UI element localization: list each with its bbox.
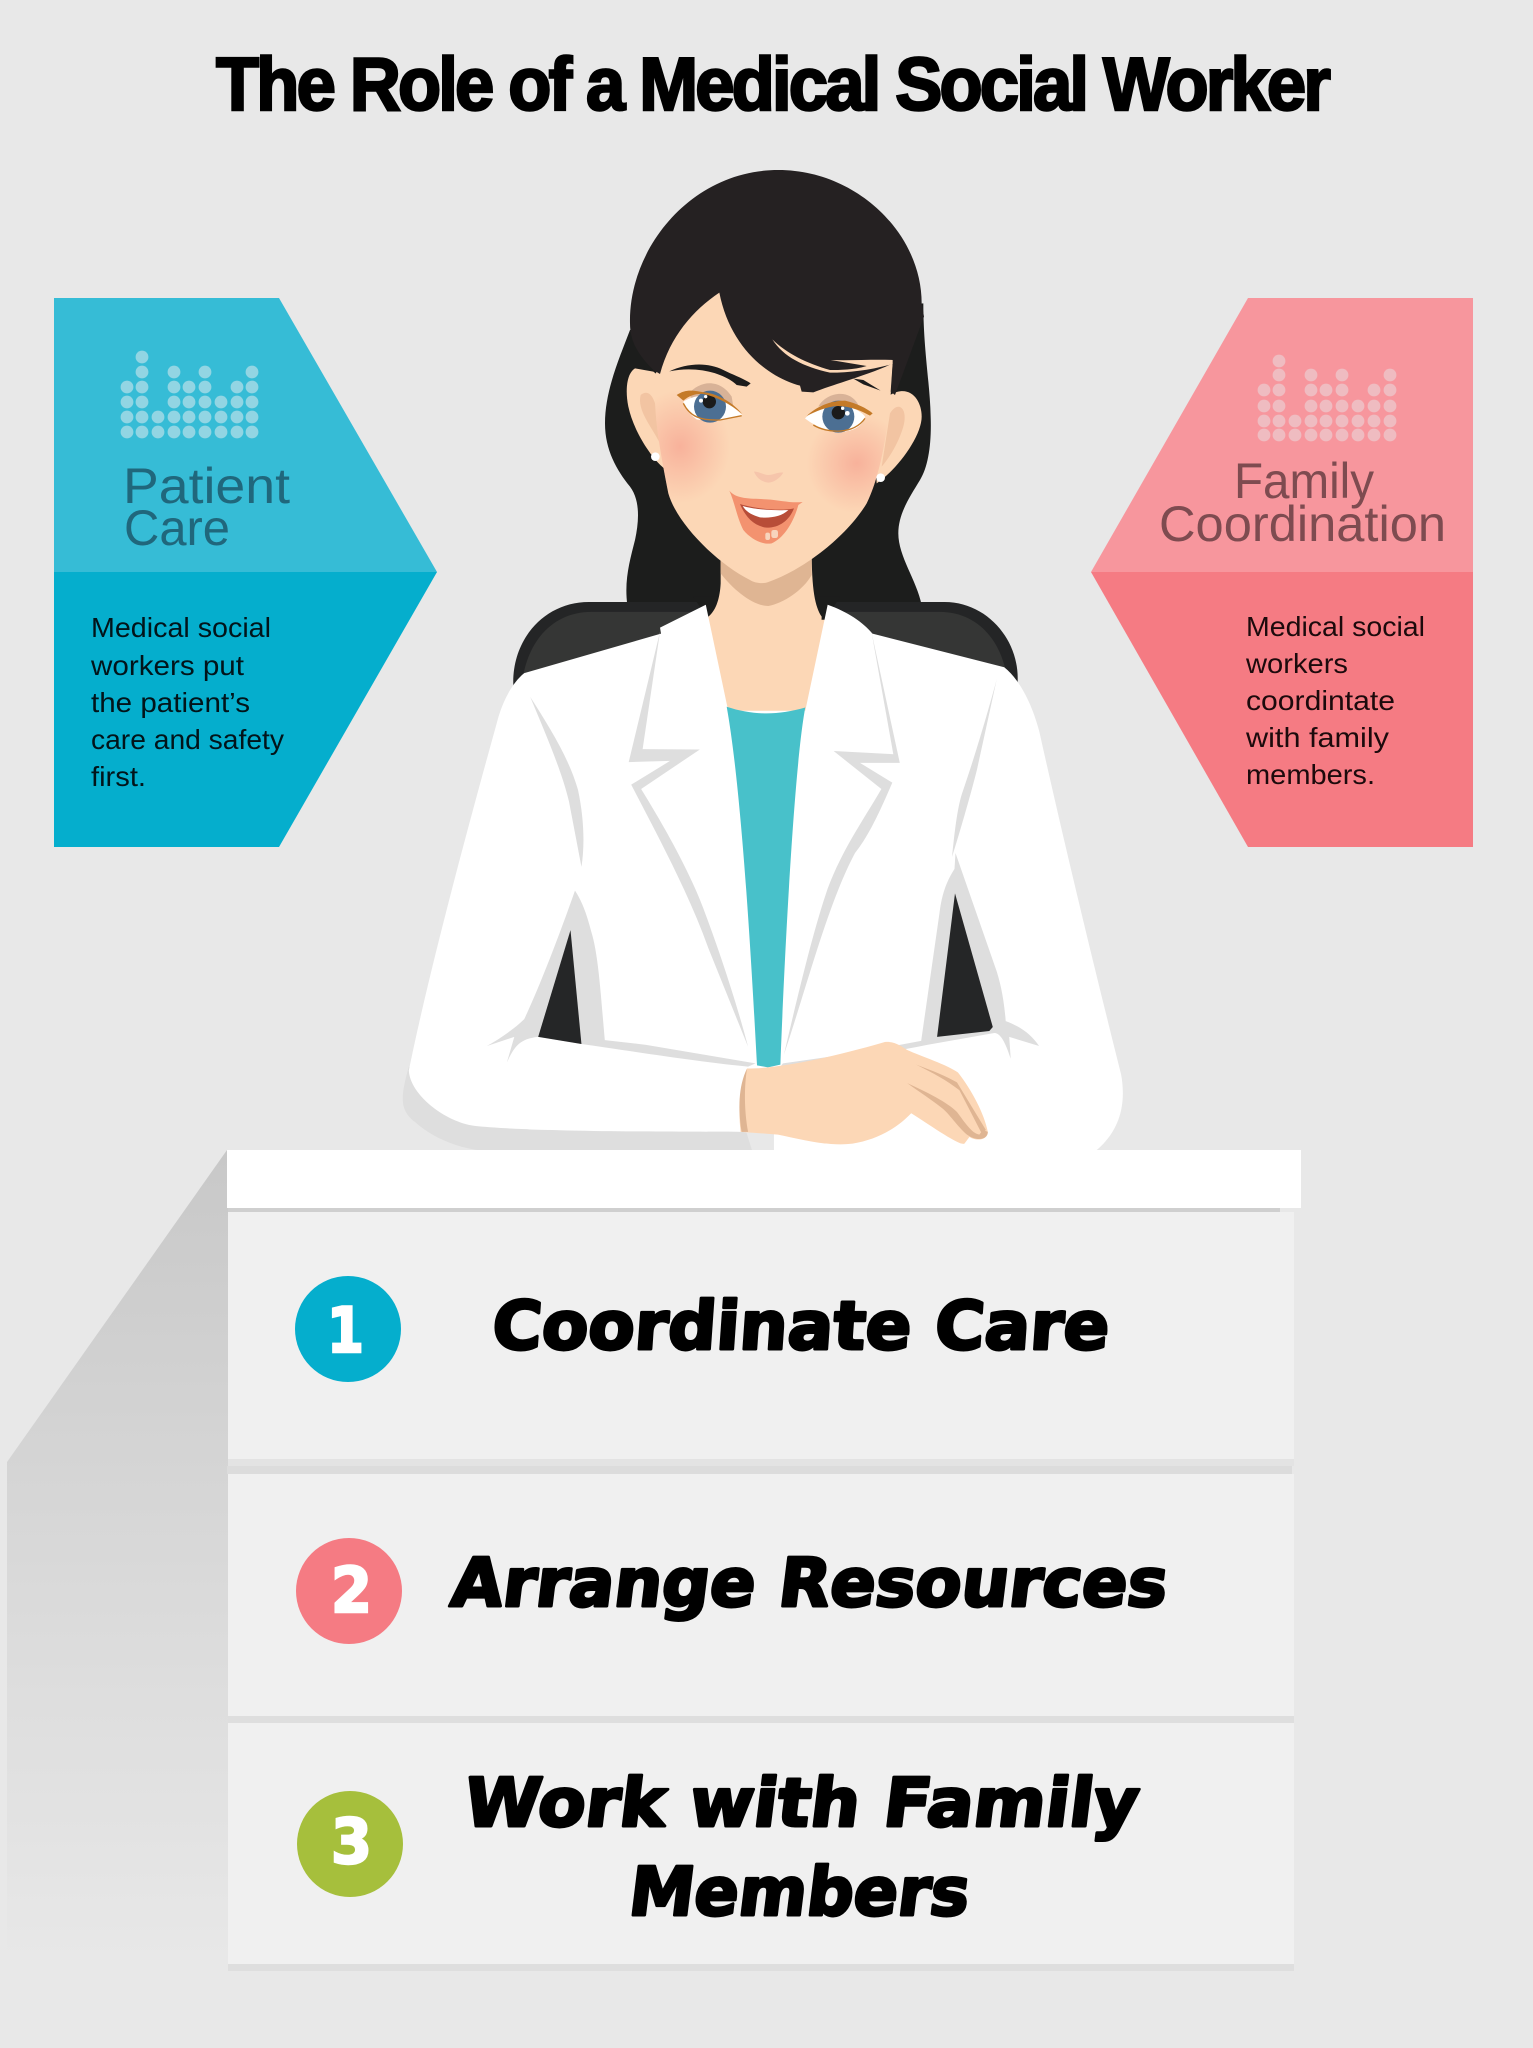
title: The Role of a Medical Social Worker: [216, 42, 1331, 126]
panel text: Medical social: [91, 612, 271, 643]
coat shadow: [403, 1067, 752, 1150]
earrings: [651, 452, 885, 482]
item 3: work with family members: [297, 1764, 1144, 1931]
label: Arrange Resources: [447, 1544, 1173, 1622]
panel text: care and safety: [91, 724, 284, 755]
hand: [739, 1042, 988, 1144]
item 2: arrange resources: [296, 1538, 1173, 1644]
label line 1: Work with Family: [460, 1764, 1144, 1842]
row 1 background: [228, 1212, 1294, 1459]
finger shadows: [907, 1065, 988, 1139]
chest skin: [701, 620, 830, 717]
teal shirt: [727, 707, 805, 1067]
label line 2: Members: [625, 1853, 975, 1931]
eyebrow: right: [853, 379, 881, 391]
neck: [708, 550, 822, 657]
panel bottom shape: [1091, 572, 1473, 847]
hair: front and bangs: [630, 170, 924, 395]
eye: left: [677, 383, 742, 423]
sleeve crease: right: [952, 679, 997, 857]
inner ear: left: [640, 393, 660, 443]
neck shadow: [721, 550, 812, 606]
hair: back: [605, 303, 931, 605]
panel heading: Coordination: [1159, 496, 1446, 552]
row 3 background: [228, 1723, 1294, 1964]
panel top shape: [54, 298, 437, 572]
face: [655, 290, 893, 583]
panel heading: Care: [124, 500, 230, 556]
chair back: [513, 597, 1018, 727]
panel top shape: [1091, 298, 1473, 572]
panel text: workers put: [90, 650, 244, 681]
coat fold: right: [780, 853, 1039, 1067]
panel bottom shape: [54, 572, 437, 847]
panel: patient care: [54, 298, 437, 847]
figure: medical social worker: [403, 170, 1123, 1150]
cuff shadow: [739, 1069, 748, 1132]
inner ear: right: [882, 407, 905, 467]
desk top: [227, 1150, 1301, 1208]
item 1: coordinate care: [295, 1276, 1112, 1382]
number 3: 3: [331, 1805, 372, 1878]
desk shadow: [7, 1150, 228, 1965]
panel text: [1245, 611, 1425, 790]
panel text: the patient’s: [91, 687, 250, 718]
lab coat: [409, 605, 1123, 1150]
sleeve crease: left: [530, 697, 583, 867]
panel text: Medical social: [1246, 611, 1425, 642]
coat and hand: [403, 605, 1123, 1150]
chair gap: left: [538, 930, 581, 1044]
blush: [656, 402, 885, 502]
panel heading: Family: [1234, 453, 1374, 509]
coat fold: left: [487, 891, 756, 1067]
chair gap: right: [937, 893, 993, 1037]
hair highlight strand: [772, 339, 893, 373]
icon: dot equalizer: [1258, 355, 1396, 441]
panel text: workers: [1245, 648, 1348, 679]
mouth: [729, 491, 803, 544]
lapel shadow: left: [629, 632, 748, 1047]
eye: right: [805, 394, 873, 433]
lapel shadow: right: [784, 632, 900, 1055]
number 1: 1: [327, 1294, 364, 1367]
ear: left: [627, 368, 664, 468]
panel text: first.: [91, 761, 146, 792]
label: Coordinate Care: [490, 1287, 1112, 1365]
panel heading: [1159, 453, 1446, 552]
ear: right: [873, 391, 922, 483]
badge 3: [297, 1791, 403, 1897]
row 2 background: [228, 1474, 1294, 1716]
panel heading: Patient: [123, 458, 290, 514]
neck and ears, face, hair front: [627, 170, 924, 657]
badge 1: [295, 1276, 401, 1382]
eyebrow: left: [669, 364, 751, 387]
nose: [754, 472, 783, 483]
panel heading: [123, 458, 290, 556]
panel: family coordination: [1091, 298, 1473, 847]
icon: dot equalizer: [121, 351, 258, 438]
desk: [227, 1150, 1301, 1971]
panel text: with family: [1245, 722, 1389, 753]
panel text: coordintate: [1246, 685, 1395, 716]
panel text: members.: [1246, 759, 1375, 790]
number 2: 2: [331, 1554, 372, 1627]
badge 2: [296, 1538, 402, 1644]
panel text: [90, 612, 284, 792]
